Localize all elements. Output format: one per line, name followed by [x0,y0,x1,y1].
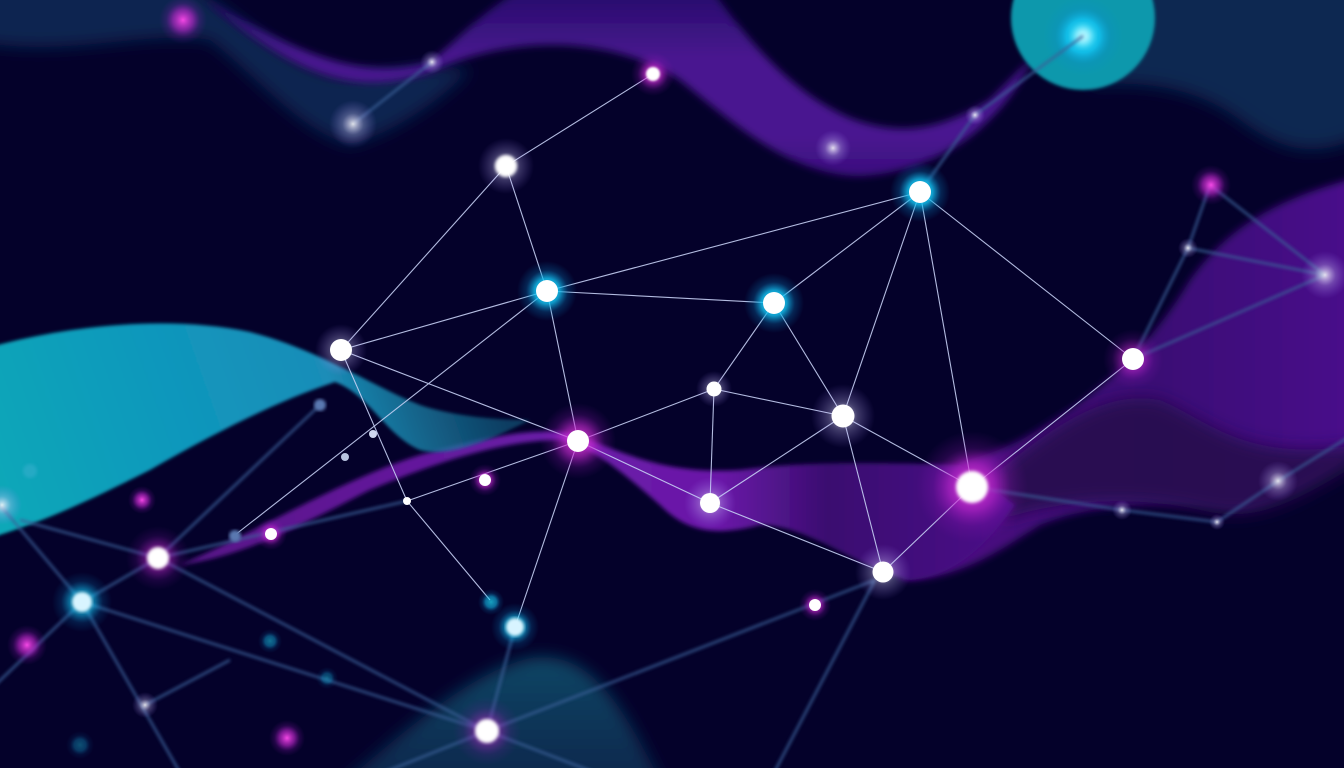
node: teal bottom [258,629,282,653]
ribbon: bottom teal [335,657,665,768]
node: small magenta left [255,518,287,550]
node: ribbon pale [815,130,851,166]
node: upper white [478,138,534,194]
node: dot 2 [229,530,241,542]
node: small lower right [1112,500,1132,520]
node: cyan lower [491,603,539,651]
node: cyan center [744,273,804,333]
sharp network edges [235,74,1133,627]
node: small upper right [965,105,985,125]
node: teal near [478,589,504,615]
node: far right [1301,251,1344,299]
node: small lower right 2 [1209,514,1225,530]
node: small top [420,50,444,74]
node: left glowing [126,526,190,590]
node: lower right white [855,544,911,600]
node: lower right [1258,461,1298,501]
node: teal bottom 2 [316,667,338,689]
node: dot 3 [23,464,37,478]
sharp nodes [52,52,1163,765]
node: tiny a [403,497,411,505]
node: left edge [0,485,22,525]
ribbon: top dark teal left [0,0,470,145]
node: cyan top right [890,162,950,222]
node: tiny b [369,430,377,438]
node: left magenta small [128,486,156,514]
node: bottom white [453,697,521,765]
node: small magenta right [799,589,831,621]
node: center small [696,371,732,407]
ribbon: left teal [0,323,530,538]
ribbon: right purple [900,172,1344,580]
ribbon: top right dark teal [1090,0,1344,149]
node: top magenta [159,0,207,44]
node: pale lower left [132,692,158,718]
node: large magenta [916,431,1028,543]
node: top left pale [329,100,377,148]
node: left white [315,324,367,376]
node: bottom magenta [269,720,305,756]
node: dot [314,399,326,411]
circle: top right teal [1011,0,1155,90]
ribbon: top purple [205,0,1032,176]
node: right small [1178,238,1198,258]
node: cyan left [517,261,577,321]
node: right white [1103,329,1163,389]
node: lower center [684,477,736,529]
node: tiny c [341,453,349,461]
ribbon: middle purple band [180,432,1015,580]
node: right magenta [1191,165,1231,205]
ribbon: right darker fold [1000,398,1344,520]
node: bottom left magenta [7,625,47,665]
node: top white magenta [631,52,675,96]
node: small magenta center [469,464,501,496]
node: teal bottom left [66,731,94,759]
node: center right [811,384,875,448]
node: center magenta [540,403,616,479]
node: left cyan [52,572,112,632]
